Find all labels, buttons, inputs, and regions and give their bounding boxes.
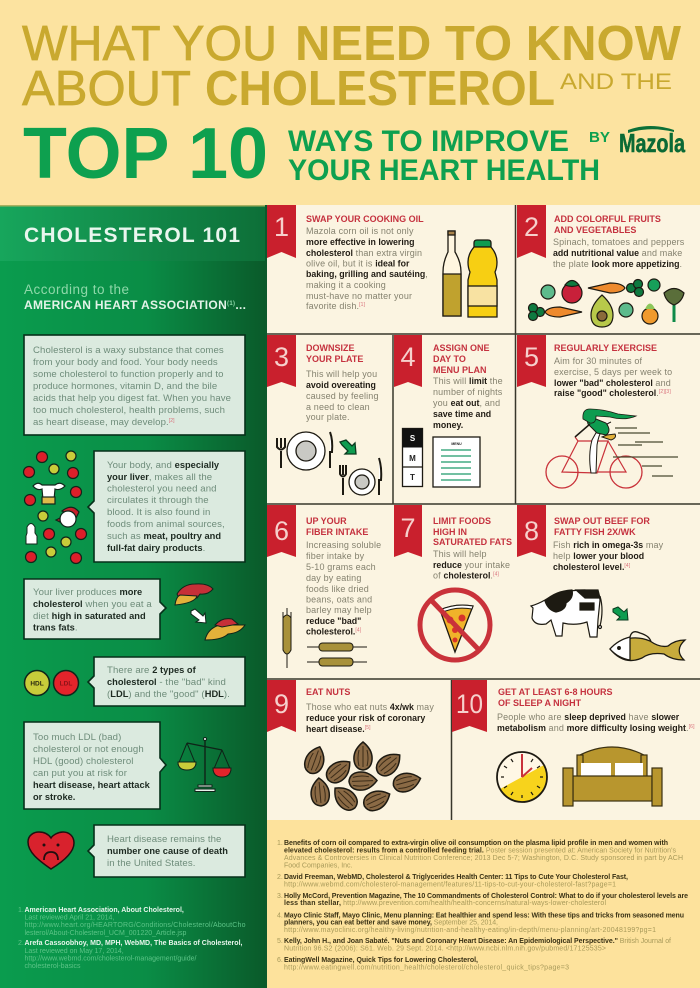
icon: plates with arrow xyxy=(277,432,381,495)
tip 10 text: GET AT LEAST 6-8 HOURS xyxy=(498,687,613,697)
tip 5 text: exercise, 5 days per week to xyxy=(554,367,672,377)
footnotes: references: Mayo Clinic Staff, Mayo Clinic, Menu planning: Eat healthier and spend less: With these tips and tricks from seasoned menu xyxy=(284,912,684,920)
subtitle: top 10: TOP 10 xyxy=(23,114,268,194)
footnotes: references: Holly McCord, Prevention Magazine, The 10 Commandments of Cholesterol Control: What to do if your cholesterol levels are xyxy=(284,893,688,900)
tip 6 text: [4] xyxy=(355,628,362,634)
tip 3 text: avoid overeating xyxy=(306,380,376,390)
callout: number one cause xyxy=(88,825,245,877)
tip 1 xyxy=(267,205,497,317)
tip 9 text xyxy=(306,687,434,734)
tip 2 text: AND VEGETABLES xyxy=(554,225,636,235)
footnotes: left: Last reviewed on May 17, 2014, xyxy=(24,948,124,955)
callout: risk: Too much LDL (bad) xyxy=(33,732,121,743)
ribbon 1 xyxy=(267,205,296,258)
tip 9 xyxy=(267,680,695,814)
tip 3 xyxy=(267,335,381,495)
footnotes: left: cholesterol-basics xyxy=(24,963,81,970)
tip 10 text: OF SLEEP A NIGHT xyxy=(498,698,582,708)
callout: definition: as heart disease, may develop. xyxy=(33,417,169,428)
tip 8 text: cholesterol level. xyxy=(553,562,624,572)
footnotes: references: Kelly, John H., and Joan Sabaté. "Nuts and Coronary Heart Disease: An Epidemiological Perspective." British Journal of xyxy=(284,938,671,945)
icon: scales xyxy=(178,738,231,792)
tip 3 text: YOUR PLATE xyxy=(306,354,363,364)
intro text: ... xyxy=(235,298,246,312)
footnotes: references: less than stellar, http://www.prevention.com/health/health-concerns/natural-ways-lower-cholesterol xyxy=(284,900,606,907)
icon: calendar: T xyxy=(410,473,415,482)
ribbon 3: 3 xyxy=(274,342,289,372)
icon: menu: MENU xyxy=(451,442,462,446)
tip 1 text: cholesterol than extra virgin xyxy=(306,248,422,258)
ribbon 8 xyxy=(517,505,546,557)
tip 5 text: raise "good" cholesterol. xyxy=(554,388,659,398)
tip 3 text xyxy=(306,343,379,422)
callout: two types: (LDL) and the "good" (HDL). xyxy=(107,689,230,700)
callout: saturated fats: Your liver produces more xyxy=(33,587,142,598)
ribbon 5 xyxy=(517,335,546,387)
ribbon 10 xyxy=(452,680,487,732)
intro text: AMERICAN HEART ASSOCIATION xyxy=(24,298,227,312)
callout: number one cause: in the United States. xyxy=(107,858,196,869)
tip 1 text: [1] xyxy=(359,302,366,308)
callout: risk: heart disease, heart attack xyxy=(33,780,151,790)
title: AND THE xyxy=(560,69,672,94)
tip 7 text xyxy=(433,516,512,580)
tip 5 text: lower "bad" cholesterol and xyxy=(554,378,671,388)
callout: liver makes cholesterol: Your body, and especially xyxy=(107,460,220,471)
tip 4 text: DAY TO xyxy=(433,354,466,364)
tip 4 xyxy=(394,335,503,487)
ribbon 9: 9 xyxy=(274,689,289,719)
title xyxy=(22,17,682,116)
icon: almonds xyxy=(302,742,423,814)
icon: calendar: M xyxy=(409,454,416,463)
tip 7 text: of cholesterol. xyxy=(433,570,493,580)
callout: definition: acids that help you digest fat. When you have xyxy=(33,393,231,404)
icon: calendar: S xyxy=(410,434,416,443)
tip 8 text: FATTY FISH 2X/WK xyxy=(554,527,636,537)
footnotes: references: 3. xyxy=(277,893,283,900)
tip 8 text: [4] xyxy=(624,563,631,569)
tip 1 text: favorite dish. xyxy=(306,301,359,311)
intro text: According to the xyxy=(24,282,130,297)
footnotes: references: http://www.webmd.com/cholesterol-management/features/11-tips-to-cut-your-cholesterol-fast?page=1 xyxy=(284,882,616,888)
tip 1 text: olive oil, but it is ideal for xyxy=(306,258,410,268)
callout: liver makes cholesterol: such as meat, poultry and xyxy=(107,531,221,542)
callout: saturated fats: diet high in saturated and xyxy=(33,611,146,622)
icon: fish xyxy=(610,632,685,661)
tip 10 text: metabolism and more difficulty losing weight. xyxy=(497,723,689,733)
tip 3 text: a need to clean xyxy=(306,402,370,412)
icon: wheat xyxy=(283,608,367,668)
tip 4 text: This will limit the xyxy=(433,376,503,386)
callout: liver makes cholesterol: blood. It is also found in xyxy=(107,507,210,518)
icon: livers with arrow xyxy=(175,584,245,640)
panel: cholesterol 101 xyxy=(0,205,266,988)
footnotes: references: Benefits of corn oil compared to extra-virgin olive oil consumption on the plasma lipid profile in men and women with xyxy=(284,840,668,847)
tip 6 text: 5-10 grams each xyxy=(306,562,376,572)
tip 2 text: Spinach, tomatoes and peppers xyxy=(553,237,685,247)
tip 8 text: help lower your blood xyxy=(553,551,644,561)
tip 7 xyxy=(394,505,512,660)
icon: HDL and LDL badges: LDL xyxy=(60,680,72,688)
ribbon 9 xyxy=(267,680,296,732)
tip 9 text: reduce your risk of coronary xyxy=(306,713,425,723)
heading: cholesterol 101: CHOLESTEROL 101 xyxy=(24,224,240,247)
ribbon 10: 10 xyxy=(456,689,483,719)
callout: risk: or stroke. xyxy=(33,792,75,802)
tip 8 xyxy=(517,505,685,661)
icon: fruits and vegetables xyxy=(528,279,684,327)
tip 6 xyxy=(267,505,381,668)
ribbon 6: 6 xyxy=(274,516,289,546)
icon: sad heart xyxy=(28,832,74,869)
footnotes: left: American Heart Association, About Cholesterol, xyxy=(24,907,184,914)
callout: liver makes cholesterol xyxy=(88,451,245,562)
callout: risk: HDL (good) cholesterol xyxy=(33,756,134,767)
tip 5 xyxy=(517,335,678,488)
tip 2 text xyxy=(553,214,685,269)
footnotes: references: David Freeman, WebMD, Cholesterol & Triglycerides Health Center: 11 Tips to Cute Your Cholesterol Fast, xyxy=(284,874,628,881)
ribbon 4 xyxy=(394,335,422,387)
tip 7 text: SATURATED FATS xyxy=(433,537,512,547)
tip 9 text: EAT NUTS xyxy=(306,687,350,697)
tip 4 text: number of nights xyxy=(433,387,503,397)
tip 10 text: [6] xyxy=(689,724,695,730)
callout: number one cause: number one cause of death xyxy=(107,846,228,856)
tip 10 text: People who are sleep deprived have slower xyxy=(497,712,680,722)
footnotes: references: elevated cholesterol: results from a controlled feeding trial. Poster session presented at: American Society for Nutrition's xyxy=(284,848,676,854)
callout: risk xyxy=(24,722,166,809)
footnotes: references: http://www.mayoclinic.org/healthy-living/nutrition-and-healthy-eating/in-depth/menu-planning/art-20048199?pg=1 xyxy=(284,927,656,934)
intro text xyxy=(24,282,246,312)
callout: definition xyxy=(24,335,245,435)
callout: liver makes cholesterol: cholesterol you need and xyxy=(107,484,217,494)
title: NEED TO KNOW xyxy=(295,17,682,71)
tip 8 text: SWAP OUT BEEF FOR xyxy=(554,516,650,526)
callout: saturated fats xyxy=(24,579,166,639)
tip 6 text: Increasing soluble xyxy=(306,540,381,550)
tip 6 text: barley may help xyxy=(306,605,372,615)
panel: top 10 tips grid xyxy=(265,205,700,988)
footnotes: references: 2. xyxy=(277,874,283,881)
footnotes: references: Advances & Controversies in Clinical Nutrition Conference; 2013 Dec 5-7; Washington, D.C. Study sponsored in part by ACH xyxy=(284,855,683,862)
ribbon 2: 2 xyxy=(524,212,539,242)
tip 5 text xyxy=(554,343,672,398)
intro text: (1) xyxy=(227,301,235,307)
tip 2 xyxy=(517,205,685,327)
ribbon 1: 1 xyxy=(274,212,289,242)
footnotes: references: Food Companies, Inc. xyxy=(284,862,353,870)
tip 2 text: the plate look more appetizing. xyxy=(553,259,682,269)
subtitle: top 10 xyxy=(23,114,610,194)
tip 7 text: reduce your intake xyxy=(433,560,510,570)
ribbon 7 xyxy=(394,505,422,557)
callout: saturated fats: cholesterol when you eat a xyxy=(33,599,152,610)
tip 2 text: ADD COLORFUL FRUITS xyxy=(554,214,661,224)
callout: risk: can put you at risk for xyxy=(33,768,128,779)
tip 4 text: you eat out, and xyxy=(433,398,500,408)
tip 9 text: Those who eat nuts 4x/wk may xyxy=(306,702,434,712)
icon: HDL and LDL badges xyxy=(24,670,78,696)
tip 6 text: beans, oats and xyxy=(306,594,372,604)
callout: definition: produce hormones, vitamin D, and the bile xyxy=(33,381,217,392)
callout: risk: cholesterol or not enough xyxy=(33,744,144,755)
ribbon 5: 5 xyxy=(524,342,539,372)
tip 9 text: heart disease. xyxy=(306,724,365,734)
tip 8 text xyxy=(553,516,664,572)
tip 7 text: This will help xyxy=(433,549,487,559)
icon: clock xyxy=(497,752,547,802)
tip 4 text: ASSIGN ONE xyxy=(433,343,490,353)
icon: cholesterol particles with cow, chicken and milk xyxy=(24,451,86,564)
footnotes: references: 6. xyxy=(277,957,283,964)
footnotes: left: lesterol/About-Cholesterol_UCM_001220_Article.jsp xyxy=(24,930,186,937)
footnotes: references: EatingWell Magazine, Quick Tips for Lowering Cholesterol, xyxy=(284,957,478,964)
tip 4 text: MENU PLAN xyxy=(433,365,486,375)
tip 3 text: DOWNSIZE xyxy=(306,343,354,353)
callout: number one cause: Heart disease remains the xyxy=(107,834,221,845)
icon: cyclist xyxy=(546,409,678,488)
icon: HDL and LDL badges: HDL xyxy=(30,680,44,688)
tip 1 text: baking, grilling and sautéing, xyxy=(306,269,428,279)
tip 1 text: more effective in lowering xyxy=(306,237,415,247)
tip 1 text: making it a cooking xyxy=(306,280,386,290)
callout: two types xyxy=(88,657,245,706)
callout: two types: There are 2 types of xyxy=(107,665,197,676)
tip 3 text: This will help you xyxy=(306,369,377,379)
footnotes: left: Arefa Cassoobhoy, MD, MPH, WebMD, The Basics of Cholesterol, xyxy=(24,940,243,947)
tip 6 text: FIBER INTAKE xyxy=(306,527,368,537)
tip 1 text: must-have no matter your xyxy=(306,291,412,301)
tip 7 text: HIGH IN xyxy=(433,527,467,537)
icon: bed xyxy=(563,747,662,806)
tip 1 text xyxy=(306,214,428,311)
tip 1 text: Mazola corn oil is not only xyxy=(306,226,414,236)
callout: liver makes cholesterol: full-fat dairy products. xyxy=(107,543,205,554)
callout: saturated fats: trans fats. xyxy=(33,622,78,634)
ribbon 4: 4 xyxy=(400,342,416,372)
tip 8 text: Fish rich in omega-3s may xyxy=(553,540,664,550)
title: ABOUT xyxy=(22,62,191,116)
subtitle: top 10: WAYS TO IMPROVE xyxy=(288,125,569,158)
icon: cow xyxy=(531,590,602,637)
callout: definition: from your body and food. Your body needs xyxy=(33,357,218,368)
tip 5 text: REGULARLY EXERCISE xyxy=(554,343,657,353)
callout: definition: too much cholesterol, health problems, such xyxy=(33,405,225,416)
footnotes: references: 1. xyxy=(277,840,283,847)
footnotes: references: 4. xyxy=(277,912,283,920)
icon: calendar xyxy=(402,428,422,486)
footnotes: references: 5. xyxy=(277,938,283,945)
tip 10 text xyxy=(497,687,695,733)
tip 1 text: SWAP YOUR COOKING OIL xyxy=(306,214,424,224)
tip 6 text: fiber intake by xyxy=(306,551,365,561)
ribbon 3 xyxy=(267,335,296,387)
tip 6 text: UP YOUR xyxy=(306,516,347,526)
tip 2 text: add nutritional value and make xyxy=(553,248,682,258)
ribbon 6 xyxy=(267,505,296,557)
callout: liver makes cholesterol: your liver, makes all the xyxy=(107,472,212,483)
footnotes: references: planners, you can eat better and save money, September 25, 2014, xyxy=(284,920,498,926)
icon: no pizza xyxy=(420,590,490,660)
subtitle: top 10: BY xyxy=(589,129,610,146)
ribbon 8: 8 xyxy=(524,516,539,546)
callout: definition: some cholesterol to function properly and to xyxy=(33,369,224,380)
callout: definition: Cholesterol is a waxy substance that comes xyxy=(33,345,224,356)
icon: arrow to fish xyxy=(613,607,628,620)
callout: liver makes cholesterol: circulates it through the xyxy=(107,495,209,506)
callout: liver makes cholesterol: foods from animal sources, xyxy=(107,519,225,530)
tip 4 text: save time and xyxy=(433,409,491,419)
callout: definition: [2] xyxy=(169,418,175,424)
icon: menu xyxy=(433,437,480,487)
tip 6 text: foods like dried xyxy=(306,584,369,594)
footnotes: left: http://www.webmd.com/cholesterol-management/guide/ xyxy=(24,956,197,962)
title: WHAT YOU xyxy=(22,17,277,71)
icon: oil bottles xyxy=(443,231,497,317)
footnotes: left: http://www.heart.org/HEARTORG/Conditions/Cholesterol/AboutCho xyxy=(24,922,246,929)
tip 6 text: reduce "bad" xyxy=(306,616,361,626)
footnotes: left xyxy=(18,907,246,970)
tip 5 text: [2][3] xyxy=(659,389,671,395)
tip 6 text: day by eating xyxy=(306,573,362,583)
footnotes: left: 1. xyxy=(18,907,24,914)
tip 3 text: caused by feeling xyxy=(306,391,379,401)
footnotes: references xyxy=(267,820,700,988)
tip 3 text: your plate. xyxy=(306,412,350,422)
subtitle: top 10: YOUR HEART HEALTH xyxy=(288,154,600,187)
tip 9 text: [5] xyxy=(365,725,371,731)
footnotes: left: Last reviewed April 21, 2014, xyxy=(24,914,114,922)
ribbon 2 xyxy=(517,205,546,258)
tip 6 text: cholesterol. xyxy=(306,626,355,636)
tip 6 text xyxy=(306,516,381,636)
tip 7 text: LIMIT FOODS xyxy=(433,516,491,526)
tip 4 text: money. xyxy=(433,420,463,430)
tip 7 text: [4] xyxy=(493,572,500,578)
title: CHOLESTEROL xyxy=(205,62,555,116)
footnotes: left: 2. xyxy=(18,940,24,947)
tip 5 text: Aim for 30 minutes of xyxy=(554,356,643,366)
tip 10 xyxy=(452,680,695,806)
ribbon 7: 7 xyxy=(400,513,416,543)
tip 4 text xyxy=(433,343,503,430)
footnotes: references: Nutrition 96.S2 (2006): S61. Web. 29 Sept. 2014. <http://www.ncbi.nlm.nih.gov/pubmed/17125535> xyxy=(284,946,606,952)
footnotes: references: http://www.eatingwell.com/nutrition_health/cholesterol/cholesterol_quick_tips?page=3 xyxy=(284,964,569,972)
callout: two types: cholesterol - the "bad" kind xyxy=(107,677,226,688)
